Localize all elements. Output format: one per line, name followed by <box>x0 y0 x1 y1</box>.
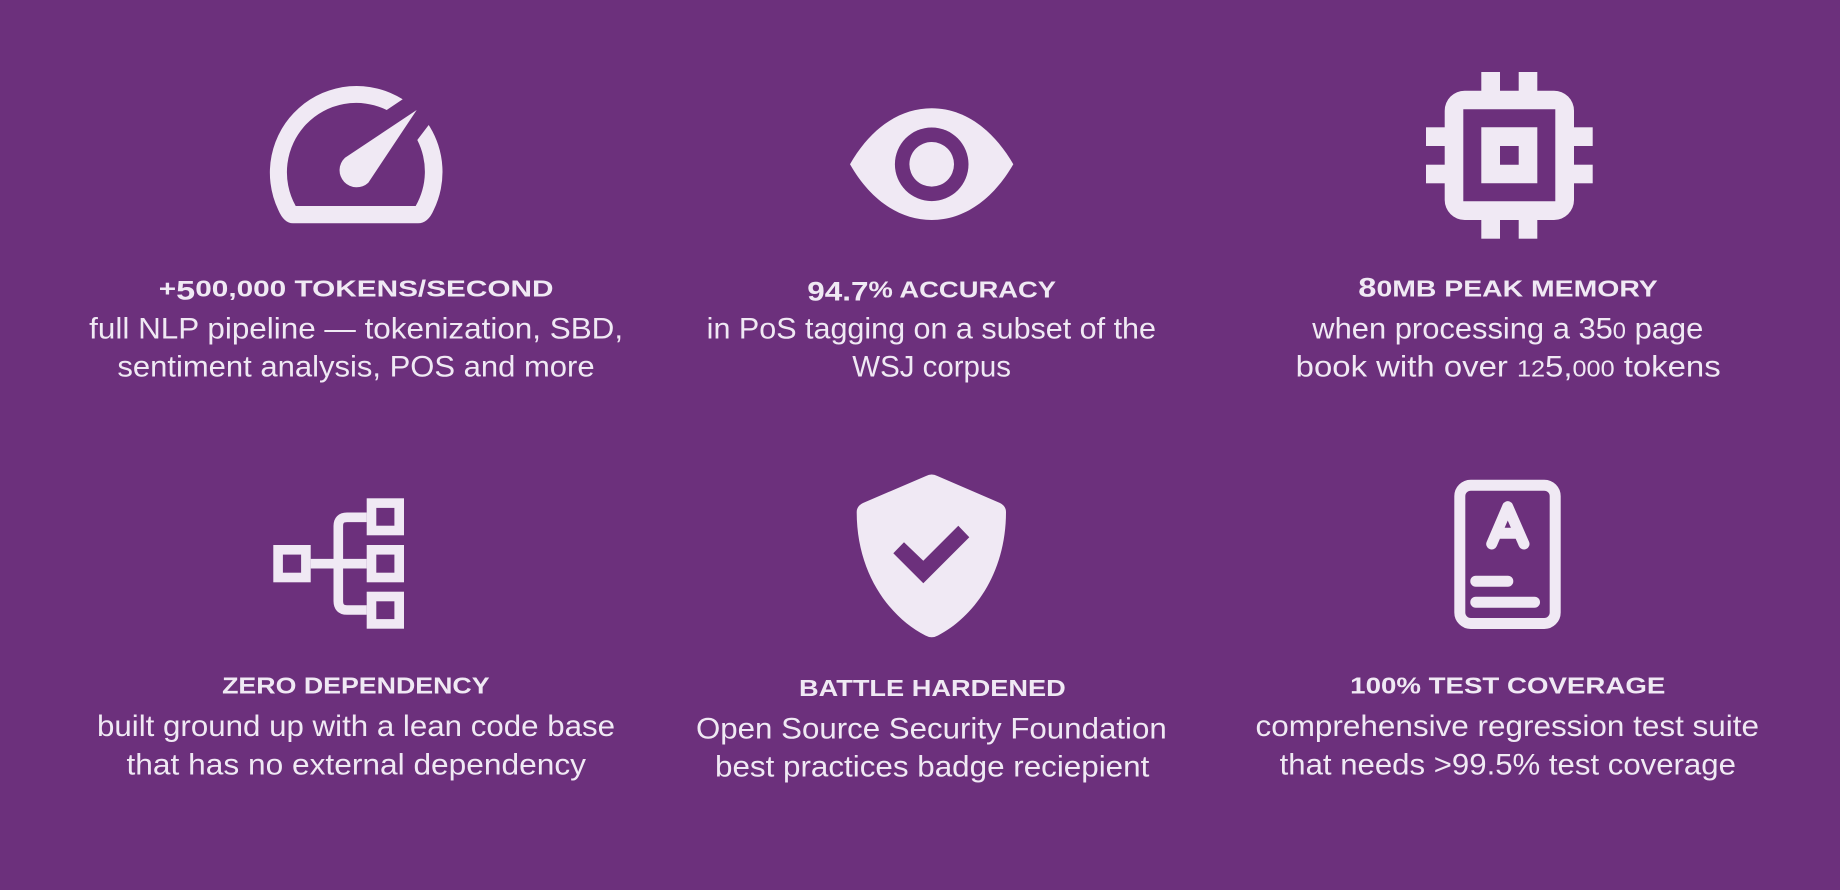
icon: shield with check mark <box>857 474 1006 637</box>
heading: tokens per second: 5 <box>176 276 195 306</box>
description: accuracy: in PoS tagging on a subset of the <box>707 312 1156 345</box>
description: peak memory: when processing a 35 0 page <box>1311 312 1703 345</box>
description: zero dependency: that has no external dependency <box>126 748 586 781</box>
description: battle hardened <box>696 712 1167 784</box>
panel: battle hardened <box>696 474 1167 784</box>
panel: accuracy <box>707 108 1156 384</box>
description: accuracy <box>707 312 1156 384</box>
description: tokens per second: sentiment analysis, POS and more <box>117 351 595 384</box>
heading: test coverage: 100% TEST COVERAGE <box>1350 672 1665 698</box>
heading: peak memory: 80MB PEAK MEMORY <box>1358 273 1658 303</box>
description: accuracy: WSJ corpus <box>852 351 1011 384</box>
description: tokens per second: full NLP pipeline — tokenization, SBD, <box>89 312 623 345</box>
icon: eye <box>850 108 1013 220</box>
panel: zero dependency <box>97 503 615 781</box>
panel: test coverage <box>1256 485 1759 781</box>
description: peak memory <box>1296 312 1721 384</box>
icon: graded document <box>1460 485 1555 624</box>
description: battle hardened: best practices badge reciepient <box>715 751 1150 784</box>
description: tokens per second <box>89 312 623 384</box>
description: test coverage: that needs >99.5% test coverage <box>1280 748 1736 781</box>
description: zero dependency <box>97 710 615 781</box>
heading: battle hardened: BATTLE HARDENED <box>799 675 1066 701</box>
heading: zero dependency: ZERO DEPENDENCY <box>222 673 490 699</box>
heading: tokens per second: + <box>159 276 173 302</box>
heading: tokens per second: 00,000 TOKENS/SECOND <box>195 276 554 302</box>
description: zero dependency: built ground up with a lean code base <box>97 710 615 743</box>
icon: speedometer gauge <box>270 86 443 223</box>
panel: peak memory <box>1296 72 1721 384</box>
description: peak memory: book with over 125,000 tokens <box>1296 351 1721 384</box>
description: test coverage: comprehensive regression test suite <box>1256 710 1759 743</box>
description: battle hardened: Open Source Security Foundation <box>696 712 1167 745</box>
icon: hierarchy tree <box>278 503 399 624</box>
heading: accuracy: 94.7 <box>807 277 869 307</box>
description: test coverage <box>1256 710 1759 781</box>
icon: microchip <box>1426 72 1593 239</box>
panel: tokens per second <box>89 86 623 384</box>
heading: accuracy: % ACCURACY <box>869 277 1056 303</box>
